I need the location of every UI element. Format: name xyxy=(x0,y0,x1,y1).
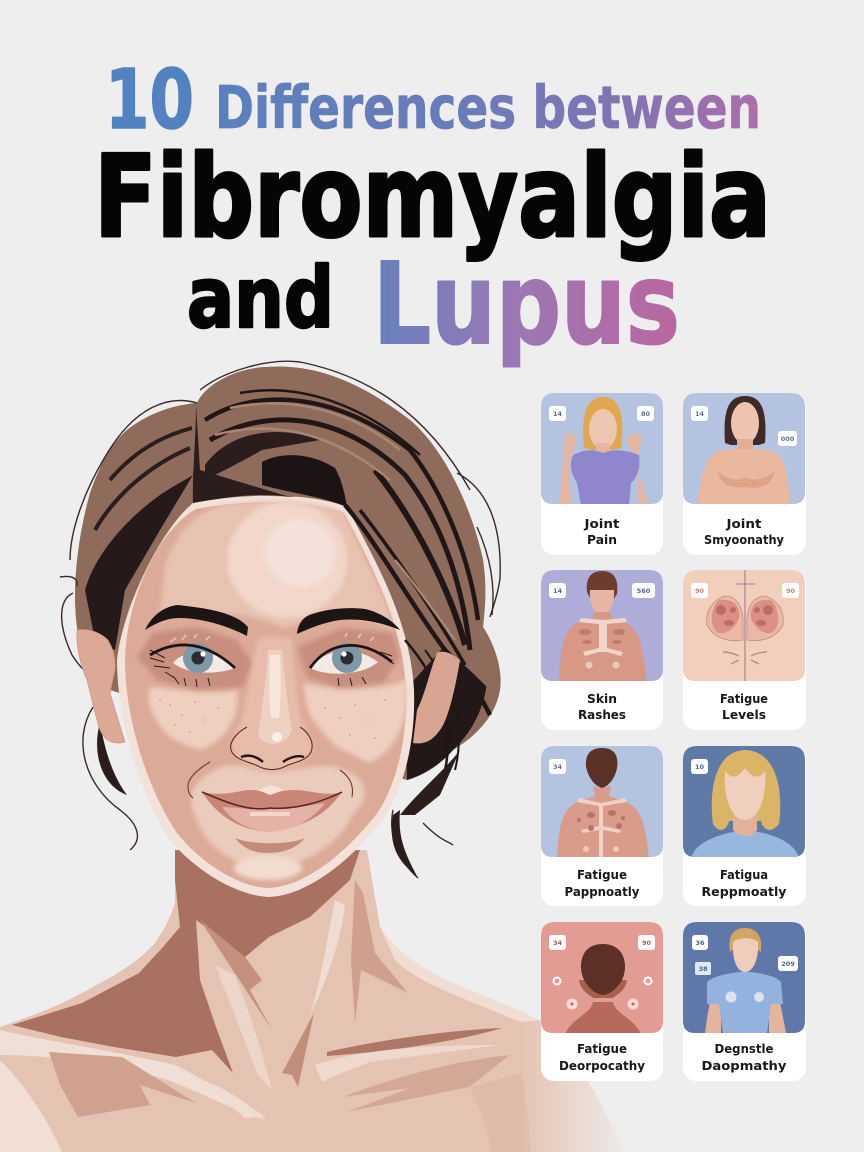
cheeks xyxy=(149,687,237,750)
card: Joint Pain xyxy=(541,393,663,555)
card label: Skin xyxy=(587,691,617,706)
badges: 80 xyxy=(641,410,650,418)
collarbones and chest marks xyxy=(49,1013,530,1152)
card label: Reppmoatly xyxy=(702,884,787,899)
badges: 14 xyxy=(553,587,562,595)
card label: Pain xyxy=(587,532,617,547)
shoulders and chest xyxy=(0,850,640,1152)
badges: 90 xyxy=(786,587,795,595)
flyaway strands xyxy=(60,361,500,878)
card image: woman in purple top xyxy=(541,393,663,505)
freckles xyxy=(159,699,386,739)
right ear xyxy=(413,652,460,743)
portrait of a woman xyxy=(0,361,640,1152)
card label xyxy=(583,516,620,547)
title line 1: 10 Differences between: 10 xyxy=(105,53,194,148)
title line 3: and Lupus: Lupus xyxy=(373,240,680,370)
badges: 34 xyxy=(553,939,562,947)
card label xyxy=(564,867,640,899)
card label: Joint xyxy=(583,516,620,531)
card image: torso with rash xyxy=(541,570,663,682)
badges: 209 xyxy=(781,960,795,968)
badges xyxy=(549,583,655,598)
card: Fatigue Levels xyxy=(683,570,806,730)
card label: Degnstle xyxy=(714,1041,774,1056)
badge: 34 xyxy=(553,763,562,771)
title line 1: 10 Differences between xyxy=(105,53,761,148)
badges xyxy=(549,406,654,421)
title line 3: and Lupus: and xyxy=(187,249,334,347)
card label: Daopmathy xyxy=(702,1058,786,1073)
badges: 38 xyxy=(698,965,708,973)
badges xyxy=(691,406,797,446)
left eye xyxy=(150,634,235,687)
badges: 14 xyxy=(553,410,562,418)
badges xyxy=(692,935,798,975)
card: Joint Smyoonathy xyxy=(683,393,806,555)
card: Fatigue Pappnoatly xyxy=(541,746,663,906)
card image: back with patches xyxy=(541,746,663,858)
badge: 10 xyxy=(695,763,704,771)
right eyebrow xyxy=(297,608,400,634)
left eyebrow xyxy=(145,605,248,636)
card: Fatigua Reppmoatly xyxy=(683,746,806,906)
hair front xyxy=(60,361,500,878)
badges: 14 xyxy=(695,410,704,418)
title xyxy=(94,53,771,370)
card label xyxy=(704,516,784,547)
eye sockets xyxy=(137,627,253,690)
card image: blonde woman xyxy=(683,746,806,858)
right eye xyxy=(310,633,394,686)
card image: bare-shoulder figure xyxy=(683,393,806,505)
card label: Fatigue xyxy=(720,691,768,706)
title line 3: and Lupus xyxy=(187,240,680,370)
card: Fatigue Deorpocathy xyxy=(541,922,663,1081)
hair back xyxy=(75,367,501,780)
card label: Deorpocathy xyxy=(559,1058,645,1073)
badges: 90 xyxy=(695,587,704,595)
badges: 000 xyxy=(781,435,795,443)
badges xyxy=(549,935,655,950)
card label: Fatigue xyxy=(577,867,627,882)
card: Degnstle Daopmathy xyxy=(683,922,806,1081)
badges: 560 xyxy=(637,587,651,595)
badges xyxy=(691,583,799,598)
card label: Rashes xyxy=(578,707,626,722)
card label: Fatigua xyxy=(720,867,768,882)
card label xyxy=(559,1041,645,1073)
card label: Smyoonathy xyxy=(704,532,784,547)
left ear xyxy=(77,629,125,743)
card label: Fatigue xyxy=(577,1041,627,1056)
card label xyxy=(578,691,626,722)
card label xyxy=(702,867,786,899)
card label: Joint xyxy=(725,516,762,531)
badges: 90 xyxy=(642,939,651,947)
lower face xyxy=(191,766,365,868)
badges: 36 xyxy=(695,939,705,947)
forehead tones xyxy=(160,501,395,630)
card: Skin Rashes xyxy=(541,570,663,730)
card label xyxy=(702,1041,786,1073)
face xyxy=(117,496,414,897)
card image: back of head with markers xyxy=(541,922,663,1034)
card label xyxy=(720,691,768,722)
mouth xyxy=(202,785,342,832)
card image: woman in blue shirt xyxy=(683,922,806,1033)
card image: lungs with patches xyxy=(683,570,806,682)
card label: Levels xyxy=(722,707,766,722)
smile lines xyxy=(188,762,352,798)
card label: Pappnoatly xyxy=(564,884,640,899)
nose xyxy=(231,636,313,771)
